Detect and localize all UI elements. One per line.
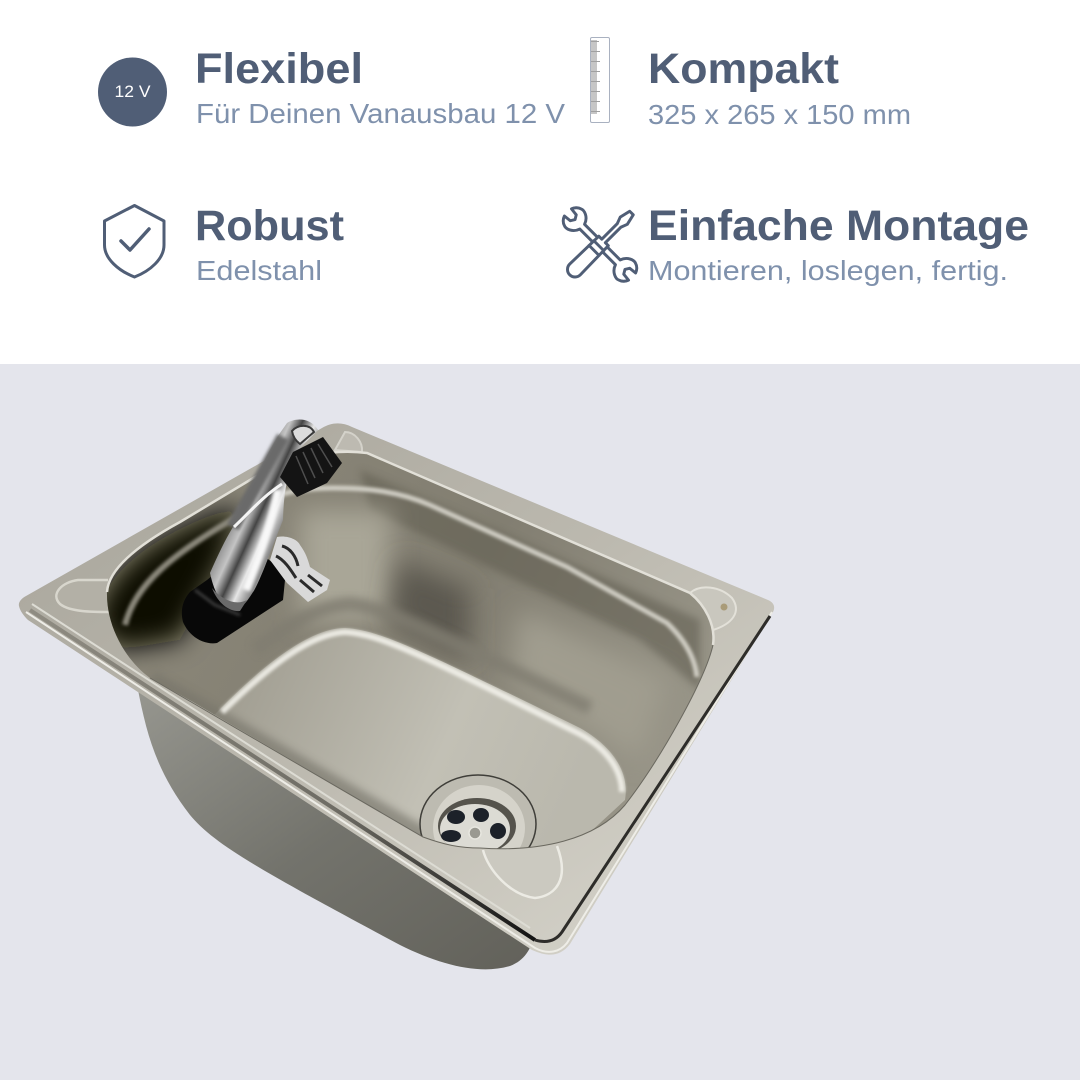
faucet spout (210, 420, 318, 608)
faucet lever (270, 537, 330, 602)
sink basin (106, 453, 712, 848)
subtext: Einfache Montage: Montieren, loslegen, fertig. (648, 255, 1008, 286)
subtext: Robust: Edelstahl (196, 255, 322, 286)
icon: ruler (590, 38, 610, 122)
feature: Flexibel (98, 45, 565, 129)
feature: Einfache Montage (559, 202, 1029, 286)
icon: 12 V badge (98, 58, 167, 126)
faucet black mount (182, 545, 285, 643)
corner embossing (56, 580, 110, 612)
feature: Robust (104, 202, 344, 286)
sink outer body (138, 690, 535, 969)
faucet chrome base reflection (212, 588, 247, 611)
faucet (182, 420, 342, 643)
maker mark (720, 604, 728, 610)
faucet black nozzle (280, 437, 342, 497)
heading: Robust: Robust (195, 202, 344, 250)
basin front edge shadow (150, 645, 713, 849)
faucet mount reflection (195, 590, 240, 615)
subtext: Kompakt: 325 x 265 x 150 mm (648, 99, 911, 130)
heading: Einfache Montage: Einfache Montage (648, 202, 1029, 250)
sink rim (19, 423, 774, 955)
heading: Flexibel: Flexibel (195, 45, 363, 93)
subtext: Flexibel: Für Deinen Vanausbau 12 V (196, 98, 565, 129)
icon: 12 V badge: 12 V (114, 82, 151, 101)
heading: Kompakt: Kompakt (648, 45, 839, 93)
drain (419, 774, 537, 848)
basin wall shading (360, 470, 700, 690)
icon: crossed wrench and screwdriver (559, 204, 641, 285)
feature: Kompakt (590, 38, 911, 130)
basin rim highlight (107, 452, 713, 645)
icon: shield with check (104, 206, 164, 277)
background panel: product area (0, 364, 1080, 1080)
basin floor (200, 628, 626, 860)
product photo: stainless steel sink with faucet (19, 420, 774, 969)
